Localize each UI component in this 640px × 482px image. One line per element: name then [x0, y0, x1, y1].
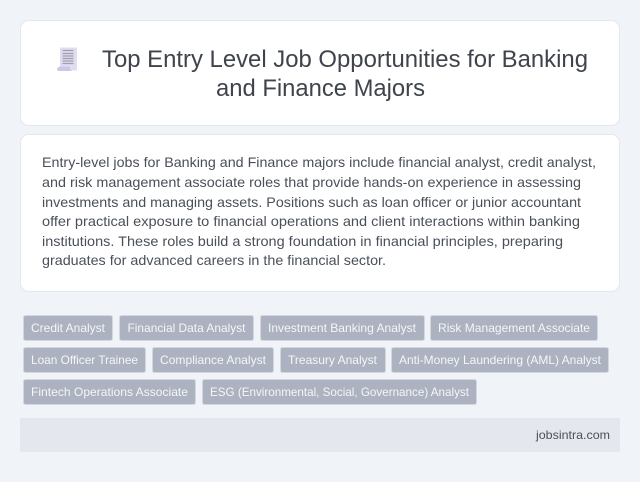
panel: title card — [20, 20, 620, 126]
icon: receipt scroll — [57, 48, 77, 71]
tag: Investment Banking Analyst — [260, 316, 424, 340]
tag: Compliance Analyst: Compliance Analyst — [160, 353, 267, 367]
tag: ESG Analyst — [202, 380, 476, 404]
text block: description: investments and managing assets. Positions such as loan officer or junior accountant — [42, 194, 581, 210]
text block: description: institutions. These roles build a strong foundation in financial principles, preparing — [42, 233, 563, 249]
text block: description: Entry-level jobs for Banking and Finance majors include financial analyst, credit analyst, — [42, 154, 596, 170]
title: Top Entry Level Job Opportunities for Banking — [102, 46, 588, 73]
panel: description — [20, 134, 620, 292]
text block: description: graduates for advanced careers in the financial sector. — [42, 252, 386, 268]
tag: Treasury Analyst — [280, 348, 386, 372]
tag: Financial Data Analyst: Financial Data Analyst — [128, 321, 246, 335]
tag: Investment Banking Analyst: Investment Banking Analyst — [268, 321, 417, 335]
tag: Credit Analyst: Credit Analyst — [31, 321, 106, 335]
tag: Risk Management Associate: Risk Management Associate — [438, 321, 590, 335]
tag: Compliance Analyst — [152, 348, 274, 372]
footer: jobsintra.com — [535, 428, 610, 442]
tag: Loan Officer Trainee — [24, 348, 146, 372]
tag: Loan Officer Trainee: Loan Officer Trainee — [31, 353, 138, 367]
tag: Credit Analyst — [24, 316, 112, 340]
text block: description — [42, 154, 596, 268]
text block: description: and risk management associate roles that provide hands-on experience in assessing — [42, 174, 581, 190]
tags: job titles — [24, 316, 608, 404]
title: and Finance Majors — [216, 75, 425, 102]
tag: Risk Management Associate — [430, 316, 598, 340]
tag: AML Analyst — [392, 348, 608, 372]
footer — [20, 418, 620, 452]
text block: description: offer practical exposure to financial operations and client interactions within banking — [42, 213, 580, 229]
tag: Treasury Analyst: Treasury Analyst — [288, 353, 378, 367]
tag: ESG Analyst: ESG (Environmental, Social, Governance) Analyst — [210, 385, 470, 399]
title — [102, 46, 588, 102]
tag: Fintech Operations Associate — [24, 380, 196, 404]
tag: Financial Data Analyst — [120, 316, 254, 340]
tag: Fintech Operations Associate: Fintech Operations Associate — [31, 385, 188, 399]
tag: AML Analyst: Anti-Money Laundering (AML) Analyst — [399, 353, 602, 367]
